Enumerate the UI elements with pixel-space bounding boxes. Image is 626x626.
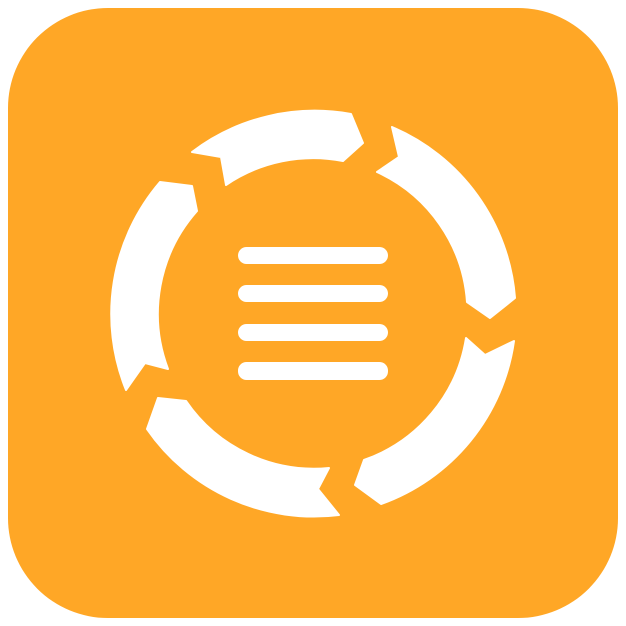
- arrow: bottom segment: [147, 398, 339, 517]
- icon: circular arrows cycle: [111, 111, 515, 517]
- list line 2: [238, 285, 388, 302]
- arrow: upper right segment: [377, 127, 515, 318]
- arrow: left segment: [111, 182, 197, 390]
- arrow: top segment: [192, 111, 363, 185]
- list line 1: [238, 247, 388, 264]
- list line 4: [238, 362, 388, 380]
- list line 3: [238, 324, 388, 341]
- arrow: lower right segment: [355, 338, 514, 504]
- icon: list lines in center: [238, 247, 388, 380]
